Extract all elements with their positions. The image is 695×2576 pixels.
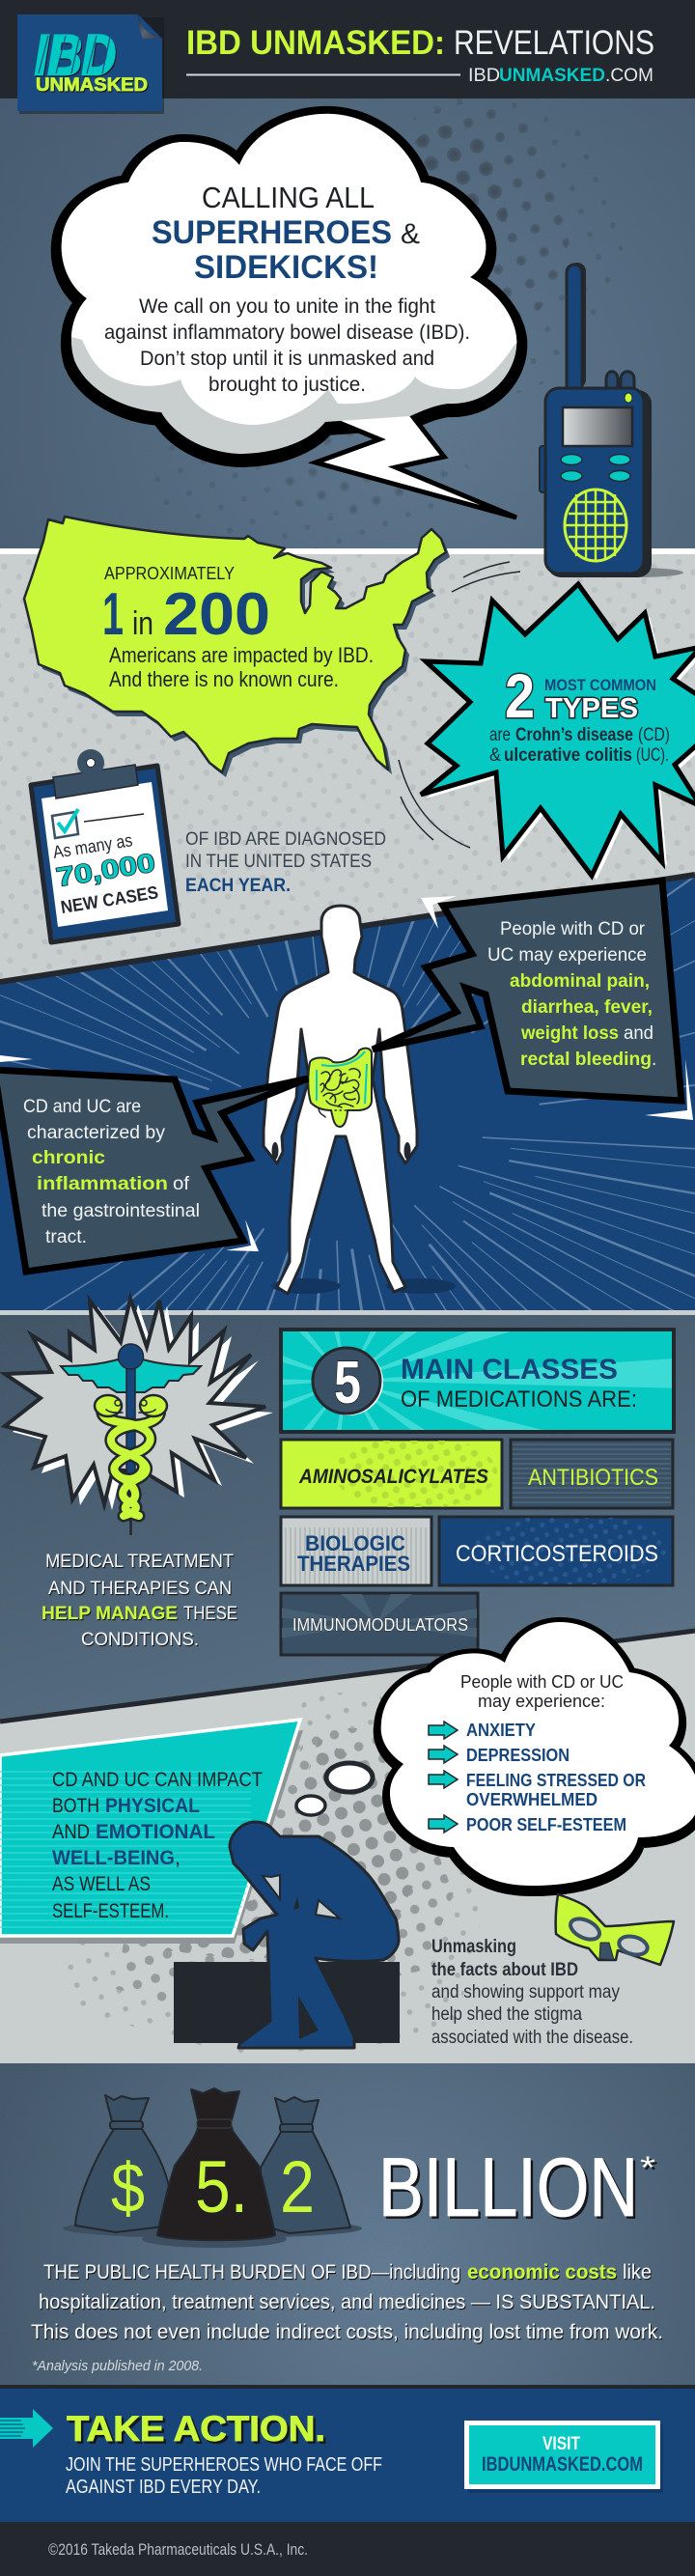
icon: clipboard with new cases stat [31, 749, 179, 942]
callout: symptoms: UC may experience [487, 945, 647, 966]
text: medical treatment [42, 1552, 237, 1650]
middle bag [157, 2088, 275, 2240]
thought cloud: people may experience: POOR SELF-ESTEEM [466, 1814, 626, 1834]
box: immunomodulators: IMMUNOMODULATORS [292, 1615, 468, 1635]
callout: symptoms [373, 881, 693, 1120]
thought cloud: people may experience: People with CD or UC [460, 1671, 624, 1692]
icon: money bags [63, 2088, 362, 2248]
text: public health burden [31, 2260, 663, 2343]
caduceus staff and wings [61, 1344, 201, 1535]
panel: calling all superheroes background [0, 87, 695, 550]
thought cloud: people may experience: may experience: [478, 1691, 605, 1711]
site url: UNMASKED [499, 65, 605, 86]
stat: 1 in 200: 200 [163, 581, 270, 648]
heading box: 5 main classes: OF MEDICATIONS ARE: [401, 1386, 637, 1413]
callout: symptoms: People with CD or [500, 919, 646, 939]
icon: money bags: $ [111, 2150, 145, 2227]
stat: 1 in 200: And there is no known cure. [109, 667, 339, 691]
box: aminosalicylates: AMINOSALICYLATES [298, 1466, 488, 1488]
text: diagnosed each year: IN THE UNITED STATES [185, 852, 372, 872]
text: medical treatment: HELP MANAGE [42, 1604, 178, 1624]
box: corticosteroids [439, 1511, 673, 1588]
icon: superhero mask [556, 1894, 674, 1965]
text: medical treatment: AND THERAPIES CAN [48, 1579, 232, 1599]
callout: chronic inflammation: characterized by [27, 1123, 166, 1143]
callout: chronic inflammation [0, 1055, 308, 1272]
cloud heading: SUPERHEROES [152, 214, 392, 251]
thought cloud: people may experience [381, 1622, 695, 1889]
panel: teal physical and emotional well-being: , [175, 1846, 181, 1869]
panel: teal physical and emotional well-being: PHYSICAL [105, 1794, 200, 1817]
icon: money bags: 5. [195, 2146, 248, 2228]
panel: medications background [0, 1315, 695, 1730]
snakes [95, 1395, 167, 1516]
callout: chronic inflammation: inflammation [37, 1173, 168, 1194]
left bag [75, 2095, 172, 2232]
text: public health burden: This does not even include indirect costs, including lost time from work. [31, 2320, 663, 2343]
panel: teal physical and emotional well-being: WELL-BEING [52, 1846, 175, 1869]
panel: economic burden background [0, 2063, 695, 2389]
stat: billion: * [640, 2150, 655, 2185]
text: diagnosed each year: OF IBD ARE DIAGNOSED [185, 829, 386, 850]
text: diagnosed each year [185, 829, 386, 896]
icon: money bags: 2 [280, 2146, 315, 2228]
panel: emotional impact background [0, 1630, 695, 2063]
site url: .COM [605, 65, 653, 86]
footnote: *Analysis published in 2008. [32, 2359, 203, 2374]
cloud heading: CALLING ALL [202, 181, 375, 214]
box: corticosteroids: CORTICOSTEROIDS [456, 1541, 658, 1567]
heading box: 5 main classes: MAIN CLASSES [401, 1354, 618, 1386]
icon: clipboard with new cases stat: As many as [51, 829, 134, 862]
thought cloud: people may experience: ANXIETY [466, 1720, 537, 1740]
burst: 2 most common types: ulcerative colitis [504, 744, 632, 766]
cloud body text: against inflammatory bowel disease (IBD). [104, 321, 470, 344]
icon: burst with caduceus [5, 1299, 273, 1535]
panel: symptoms sunburst background [0, 872, 695, 1315]
thought cloud: people may experience: OVERWHELMED [466, 1789, 598, 1809]
stat: 1 in 200: APPROXIMATELY [104, 563, 235, 583]
text: unmasking the facts: help shed the stigma [431, 2004, 582, 2025]
icon: clipboard with new cases stat: NEW CASES [59, 882, 159, 917]
panel: teal physical and emotional well-being: AND [52, 1820, 90, 1843]
icon: arrow [429, 1815, 458, 1833]
callout: chronic inflammation: of [173, 1174, 190, 1194]
thought cloud: people may experience: DEPRESSION [466, 1745, 570, 1765]
action text: AGAINST IBD EVERY DAY. [66, 2477, 261, 2498]
callout: symptoms: abdominal pain, [510, 970, 650, 992]
burst: 2 most common types: & [489, 744, 501, 766]
action heading: TAKE ACTION. [67, 2409, 325, 2449]
icon: clipboard with new cases stat: 70,000 [54, 848, 157, 892]
text: public health burden: economic costs [467, 2260, 617, 2283]
burst: 2 most common types: (UC). [636, 744, 669, 766]
footer [0, 2522, 695, 2576]
cloud body text: We call on you to unite in the fight [139, 294, 435, 318]
text: unmasking the facts: associated with the disease. [431, 2028, 633, 2048]
heading box: 5 main classes: 5 [334, 1350, 361, 1416]
burst: 2 most common types: (CD) [638, 724, 670, 745]
stat: billion: BILLION [378, 2142, 638, 2234]
action text [66, 2454, 382, 2498]
icon: arrow [429, 1722, 458, 1739]
burst: 2 most common types: 2 [505, 661, 535, 731]
icon: arrow [429, 1771, 458, 1788]
icon: walkie-talkie radio [540, 263, 683, 577]
figure: seated person with head in hands [230, 1822, 399, 2048]
intestines [308, 1049, 372, 1127]
map: United States silhouette [24, 517, 450, 777]
logo: IBD [35, 24, 116, 87]
text: unmasking the facts: Unmasking [431, 1937, 516, 1957]
button: visit site: VISIT [542, 2434, 580, 2454]
box: biologic therapies: BIOLOGIC [305, 1531, 405, 1555]
callout: symptoms: . [652, 1050, 656, 1070]
burst: 2 most common types [421, 584, 695, 880]
right bag [261, 2097, 350, 2233]
text: unmasking the facts: and showing support may [431, 1982, 620, 2002]
panel: teal physical and emotional well-being: CD AND UC CAN IMPACT [52, 1768, 263, 1791]
box: aminosalicylates [281, 1436, 502, 1509]
panel: teal physical and emotional well-being: BOTH [52, 1794, 99, 1817]
text: public health burden: like [623, 2260, 652, 2283]
burst: 2 most common types: are [489, 724, 511, 745]
panel: teal physical and emotional well-being: EMOTIONAL [96, 1820, 215, 1843]
callout: chronic inflammation: the gastrointestinal [42, 1201, 200, 1221]
footer: ©2016 Takeda Pharmaceuticals U.S.A., Inc. [48, 2540, 308, 2559]
button: visit site: IBDUNMASKED.COM [482, 2453, 643, 2476]
logo [17, 14, 164, 114]
text: medical treatment: CONDITIONS. [81, 1630, 199, 1650]
box: biologic therapies: THERAPIES [297, 1552, 410, 1576]
panel: take action [0, 2389, 695, 2522]
box: antibiotics [511, 1440, 673, 1508]
stat: 1 in 200: Americans are impacted by IBD. [109, 643, 374, 667]
site url: IBD [468, 65, 500, 86]
panel: teal physical and emotional well-being: AS WELL AS [52, 1872, 151, 1895]
thought cloud: people may experience: FEELING STRESSED OR [466, 1770, 646, 1790]
icon: arrow [0, 2409, 53, 2448]
text: diagnosed each year: EACH YEAR. [185, 876, 291, 896]
cloud heading: SIDEKICKS! [194, 249, 378, 286]
box: immunomodulators [280, 1591, 479, 1657]
text: unmasking the facts [431, 1937, 633, 2048]
title: IBD UNMASKED: [186, 24, 445, 62]
callout: symptoms: rectal bleeding [520, 1049, 652, 1070]
box: biologic therapies [281, 1517, 431, 1585]
burst: 2 most common types: TYPES [545, 693, 638, 724]
action lines around burst [399, 562, 520, 848]
burst: 2 most common types: MOST COMMON [544, 676, 656, 694]
callout: chronic inflammation: chronic [32, 1147, 105, 1168]
bench [174, 1962, 400, 2043]
cloud heading [152, 181, 420, 286]
text: medical treatment: THESE [183, 1604, 237, 1624]
text: medical treatment: MEDICAL TREATMENT [45, 1552, 234, 1572]
cloud body text [104, 294, 470, 396]
panel: teal physical and emotional well-being [0, 1720, 303, 1944]
burst: 2 most common types: Crohn’s disease [515, 724, 633, 745]
button: visit site [467, 2423, 663, 2493]
speech cloud: calling all superheroes [39, 97, 541, 518]
stat: 1 in 200: in [132, 605, 153, 642]
title [186, 24, 654, 62]
thought bubbles [296, 1763, 373, 1815]
panel: teal physical and emotional well-being: SELF-ESTEEM. [52, 1899, 169, 1922]
text: unmasking the facts: the facts about IBD [431, 1960, 578, 1980]
cloud body text: brought to justice. [208, 373, 366, 396]
callout: symptoms: diarrhea, fever, [521, 996, 653, 1018]
icon: arrow [429, 1746, 458, 1763]
logo: UNMASKED [36, 75, 148, 96]
cloud heading: & [401, 218, 420, 250]
callout: symptoms: and [624, 1023, 653, 1044]
site url [186, 65, 653, 86]
figure: human body with intestines [264, 906, 417, 1294]
stat: 1 in 200 [102, 563, 374, 691]
callout: chronic inflammation: tract. [45, 1227, 87, 1247]
callout: chronic inflammation: CD and UC are [23, 1097, 141, 1117]
stat: 1 in 200: 1 [102, 581, 124, 648]
panel: gray stats section background [0, 548, 695, 989]
callout: symptoms: weight loss [520, 1022, 619, 1044]
box: antibiotics: ANTIBIOTICS [528, 1465, 658, 1491]
heading box: 5 main classes [279, 1328, 676, 1434]
text: public health burden: hospitalization, treatment services, and medicines — IS SUBSTANTIAL. [39, 2290, 655, 2313]
text: public health burden: THE PUBLIC HEALTH BURDEN OF IBD—including [43, 2260, 460, 2283]
action text: JOIN THE SUPERHEROES WHO FACE OFF [66, 2454, 382, 2476]
title: REVELATIONS [454, 24, 654, 62]
cloud body text: Don’t stop until it is unmasked and [140, 347, 434, 370]
header bar [0, 0, 695, 114]
